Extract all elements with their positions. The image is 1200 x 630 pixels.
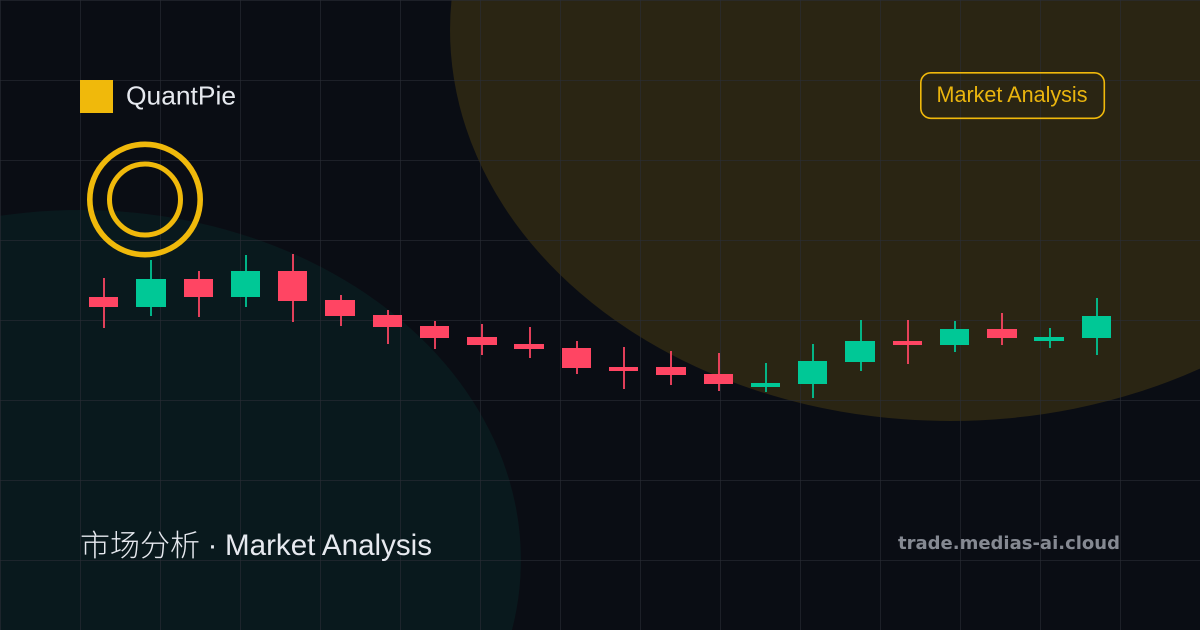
title: Market Analysis xyxy=(225,529,432,562)
candlestick chart xyxy=(89,254,1111,398)
background ellipse: gold xyxy=(450,0,1200,421)
icon: concentric rings xyxy=(90,144,200,255)
brand name: QuantPie xyxy=(126,80,236,110)
background ellipse: teal xyxy=(0,210,521,630)
badge: Market Analysis: Market Analysis xyxy=(936,82,1088,107)
title: 市场分析 xyxy=(80,530,200,563)
logo mark xyxy=(80,80,113,113)
title: · xyxy=(208,529,218,562)
badge: Market Analysis xyxy=(921,73,1104,118)
logo xyxy=(80,80,236,113)
domain: trade.medias-ai.cloud xyxy=(898,533,1120,554)
